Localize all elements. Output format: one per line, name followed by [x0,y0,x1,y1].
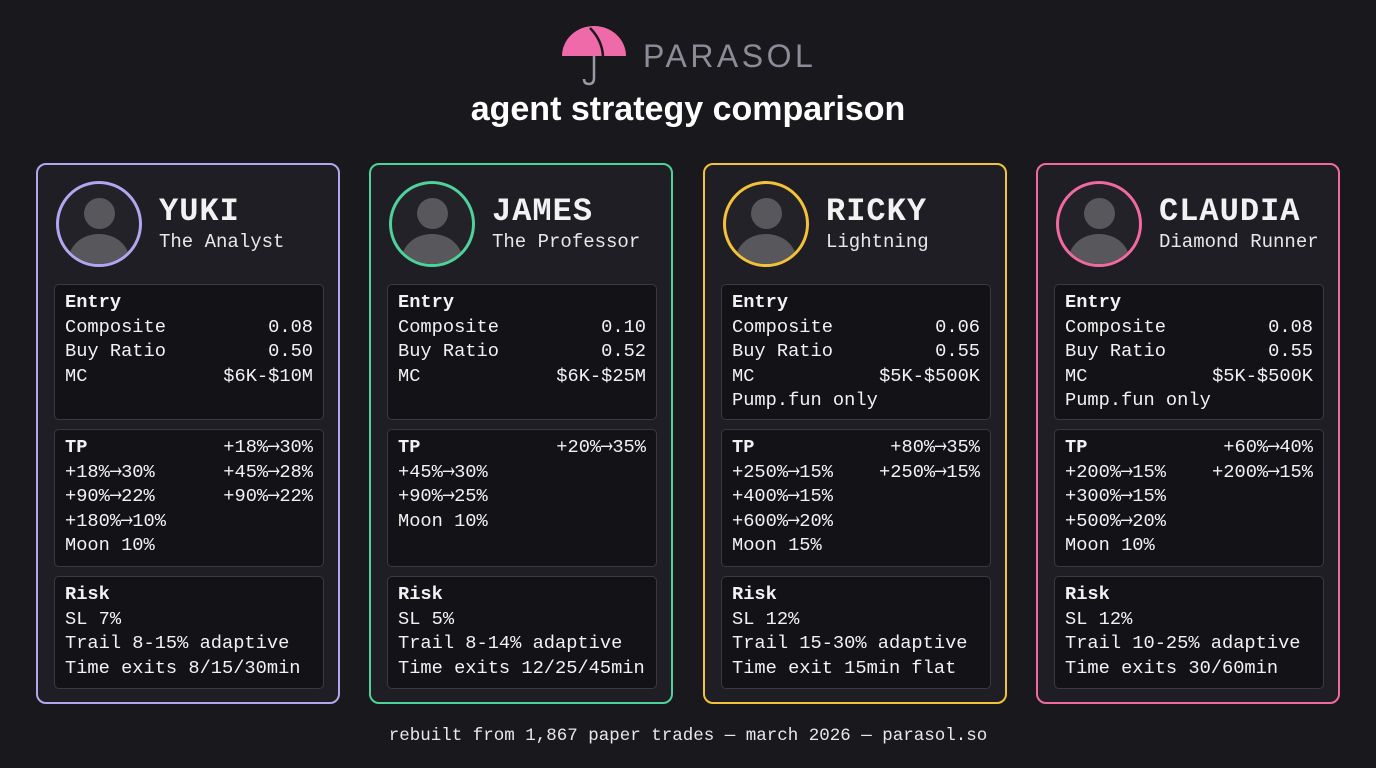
TP box: +60% 40% [1223,436,1313,458]
entry box: MC [398,365,420,387]
entry box [54,284,324,420]
risk box: Trail 10-25% adaptive [1065,632,1301,654]
risk box [387,576,657,689]
TP box: +90% 25% [398,485,488,507]
TP box: +20% 35% [556,436,646,458]
TP box: +90% 22% [65,485,155,507]
TP box: → [1121,497,1133,536]
entry box: MC [1065,365,1087,387]
risk box: SL 12% [1065,608,1132,630]
entry box: $5K-$500K [879,365,980,387]
panel: JAMES [369,163,673,704]
entry box: 0.08 [1268,316,1313,338]
avatar [1056,181,1142,267]
entry box: Entry [1065,291,1121,313]
entry box: Entry [398,291,454,313]
TP box: +600% 20% [732,510,833,532]
risk box [721,576,991,689]
TP box: +200% 15% [1212,461,1313,483]
risk box: SL 7% [65,608,121,630]
TP box: → [268,448,280,487]
avatar [56,181,142,267]
TP box: TP [65,436,87,458]
risk box: SL 5% [398,608,454,630]
TP box: → [935,448,947,487]
TP box [387,429,657,567]
entry box: 0.08 [268,316,313,338]
risk box: Trail 8-15% adaptive [65,632,289,654]
entry box: 0.10 [601,316,646,338]
TP box: TP [398,436,420,458]
risk box: Time exits 30/60min [1065,657,1278,679]
TP box: → [443,472,454,512]
TP box: → [110,448,121,487]
risk box: Trail 15-30% adaptive [732,632,968,654]
entry box: $6K-$10M [223,365,313,387]
icon: umbrella [562,26,626,84]
footer: rebuilt from 1,867 paper trades — march 2026 — parasol.so [389,726,987,746]
entry box: Composite [65,316,166,338]
avatar [389,181,475,267]
entry box: Entry [732,291,788,313]
TP box: → [110,472,121,512]
entry box [387,284,657,420]
TP box: Moon 10% [398,510,488,532]
TP box: TP [732,436,754,458]
entry box: Buy Ratio [1065,340,1166,362]
TP box: → [1121,472,1133,512]
risk box: Risk [65,583,110,605]
entry box: Composite [398,316,499,338]
entry box: 0.50 [268,340,313,362]
risk box: Time exits 12/25/45min [398,657,645,679]
entry box: Buy Ratio [398,340,499,362]
entry box [1054,284,1324,420]
TP box: → [268,423,280,463]
entry box: $5K-$500K [1212,365,1313,387]
subtitle: The Analyst [159,231,284,253]
TP box: → [121,497,133,536]
name: YUKI [159,193,240,230]
risk box: Risk [1065,583,1110,605]
TP box: +300% 15% [1065,485,1166,507]
TP box: → [788,448,800,487]
subtitle: The Professor [492,231,640,253]
risk box: Risk [398,583,443,605]
name: RICKY [826,193,927,230]
TP box: → [788,472,800,512]
TP box: +18% 30% [223,436,313,458]
TP box: Moon 15% [732,534,822,556]
risk box [54,576,324,689]
TP box [721,429,991,567]
TP box: +18% 30% [65,461,155,483]
entry box: MC [732,365,754,387]
TP box: → [788,497,800,536]
TP box: → [1268,423,1280,463]
title: agent strategy comparison [471,90,905,128]
TP box: +45% 30% [398,461,488,483]
TP box: Moon 10% [65,534,155,556]
entry box: Pump.fun only [732,389,878,411]
risk box: Time exits 8/15/30min [65,657,301,679]
name: JAMES [492,193,593,230]
panel: CLAUDIA [1036,163,1340,704]
name: CLAUDIA [1159,193,1300,230]
TP box: → [935,423,947,463]
TP box: +45% 28% [223,461,313,483]
entry box: Composite [732,316,833,338]
risk box [1054,576,1324,689]
TP box: → [1121,448,1133,487]
panel: RICKY [703,163,1007,704]
TP box [1054,429,1324,567]
TP box: +80% 35% [890,436,980,458]
risk box: Time exit 15min flat [732,657,956,679]
entry box: Pump.fun only [1065,389,1211,411]
entry box: 0.06 [935,316,980,338]
risk box: Trail 8-14% adaptive [398,632,622,654]
entry box: MC [65,365,87,387]
avatar [723,181,809,267]
TP box: +250% 15% [732,461,833,483]
TP box: → [443,448,454,487]
entry box [721,284,991,420]
TP box: +400% 15% [732,485,833,507]
TP box: → [1268,448,1280,487]
entry box: $6K-$25M [556,365,646,387]
entry box: 0.55 [1268,340,1313,362]
logo [562,26,816,86]
subtitle: Lightning [826,231,929,253]
entry box: 0.52 [601,340,646,362]
brand name: PARASOL [643,38,816,74]
entry box: Composite [1065,316,1166,338]
TP box: → [601,423,613,463]
risk box: Risk [732,583,777,605]
TP box: Moon 10% [1065,534,1155,556]
TP box [54,429,324,567]
TP box: TP [1065,436,1087,458]
entry box: Entry [65,291,121,313]
TP box: +200% 15% [1065,461,1166,483]
entry box: Buy Ratio [65,340,166,362]
TP box: → [268,472,280,512]
entry box: 0.55 [935,340,980,362]
TP box: +90% 22% [223,485,313,507]
TP box: +250% 15% [879,461,980,483]
TP box: +500% 20% [1065,510,1166,532]
entry box: Buy Ratio [732,340,833,362]
TP box: +180% 10% [65,510,166,532]
risk box: SL 12% [732,608,799,630]
subtitle: Diamond Runner [1159,231,1319,253]
panel: YUKI [36,163,340,704]
